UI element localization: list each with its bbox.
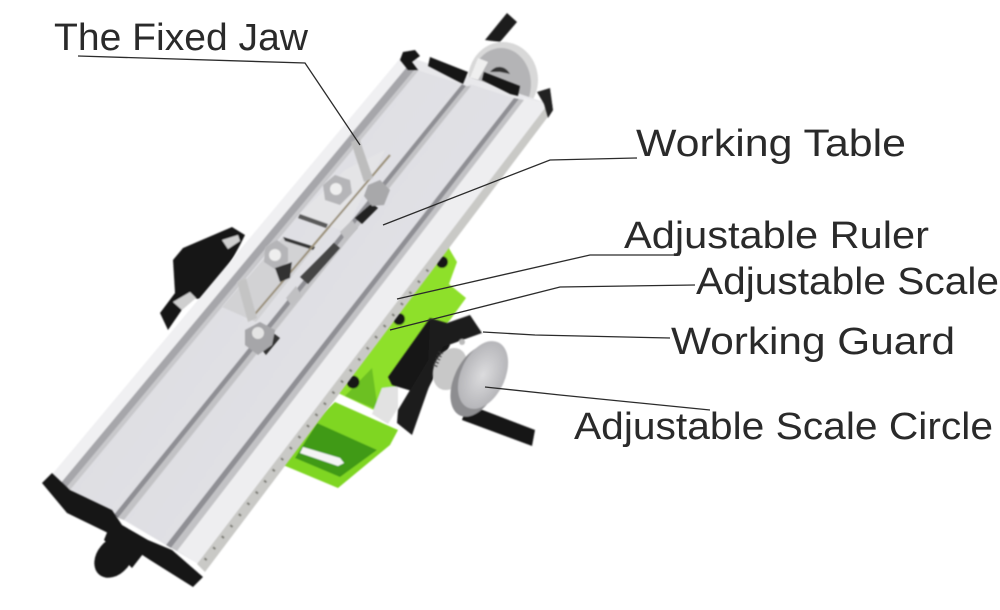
icon: left clamp knob [160, 227, 245, 330]
leader: working table [383, 158, 637, 225]
groove three [166, 98, 519, 548]
nuts [323, 175, 352, 205]
jaw bar [250, 155, 390, 320]
label: Working Guard: Working Guard [671, 321, 955, 363]
groove two [113, 84, 466, 518]
rail: aluminium table [50, 55, 553, 572]
graduated dial [426, 342, 474, 396]
flat panel three [176, 98, 553, 565]
handle [462, 404, 535, 446]
icon: rear end caps [400, 50, 553, 118]
left rail strip [50, 55, 411, 484]
leader: working guard [483, 332, 670, 338]
flat panel one [70, 70, 462, 516]
component: working guard [388, 315, 482, 435]
leader lines [78, 56, 710, 410]
component: fixed jaw assembly [222, 138, 390, 355]
label: The Fixed Jaw: The Fixed Jaw [54, 17, 309, 59]
screws [351, 138, 373, 182]
leader: adjustable scale [390, 285, 695, 330]
flat panel two [122, 84, 514, 545]
label: Working Table: Working Table [636, 123, 906, 165]
groove one [60, 62, 416, 488]
jaw plate [222, 237, 315, 322]
handwheel rim [440, 337, 512, 425]
leader: scale circle [485, 387, 710, 410]
label: Adjustable Ruler: Adjustable Ruler [624, 215, 929, 257]
label: Adjustable Scale Circle: Adjustable Scale Circle [574, 406, 993, 448]
slot shadow [300, 243, 340, 284]
leader: adjustable ruler [397, 255, 680, 299]
adjustable ruler strip [197, 108, 553, 572]
component: adjustable scale circle [426, 333, 535, 446]
label: Adjustable Scale: Adjustable Scale [696, 261, 999, 303]
base: green lower slide [283, 402, 398, 488]
leader: fixed jaw [78, 56, 360, 145]
base: green saddle [338, 245, 466, 424]
icon: rear handwheel [468, 13, 538, 120]
handwheel face [448, 333, 518, 417]
icon: front end cap and lead screw [42, 473, 203, 587]
